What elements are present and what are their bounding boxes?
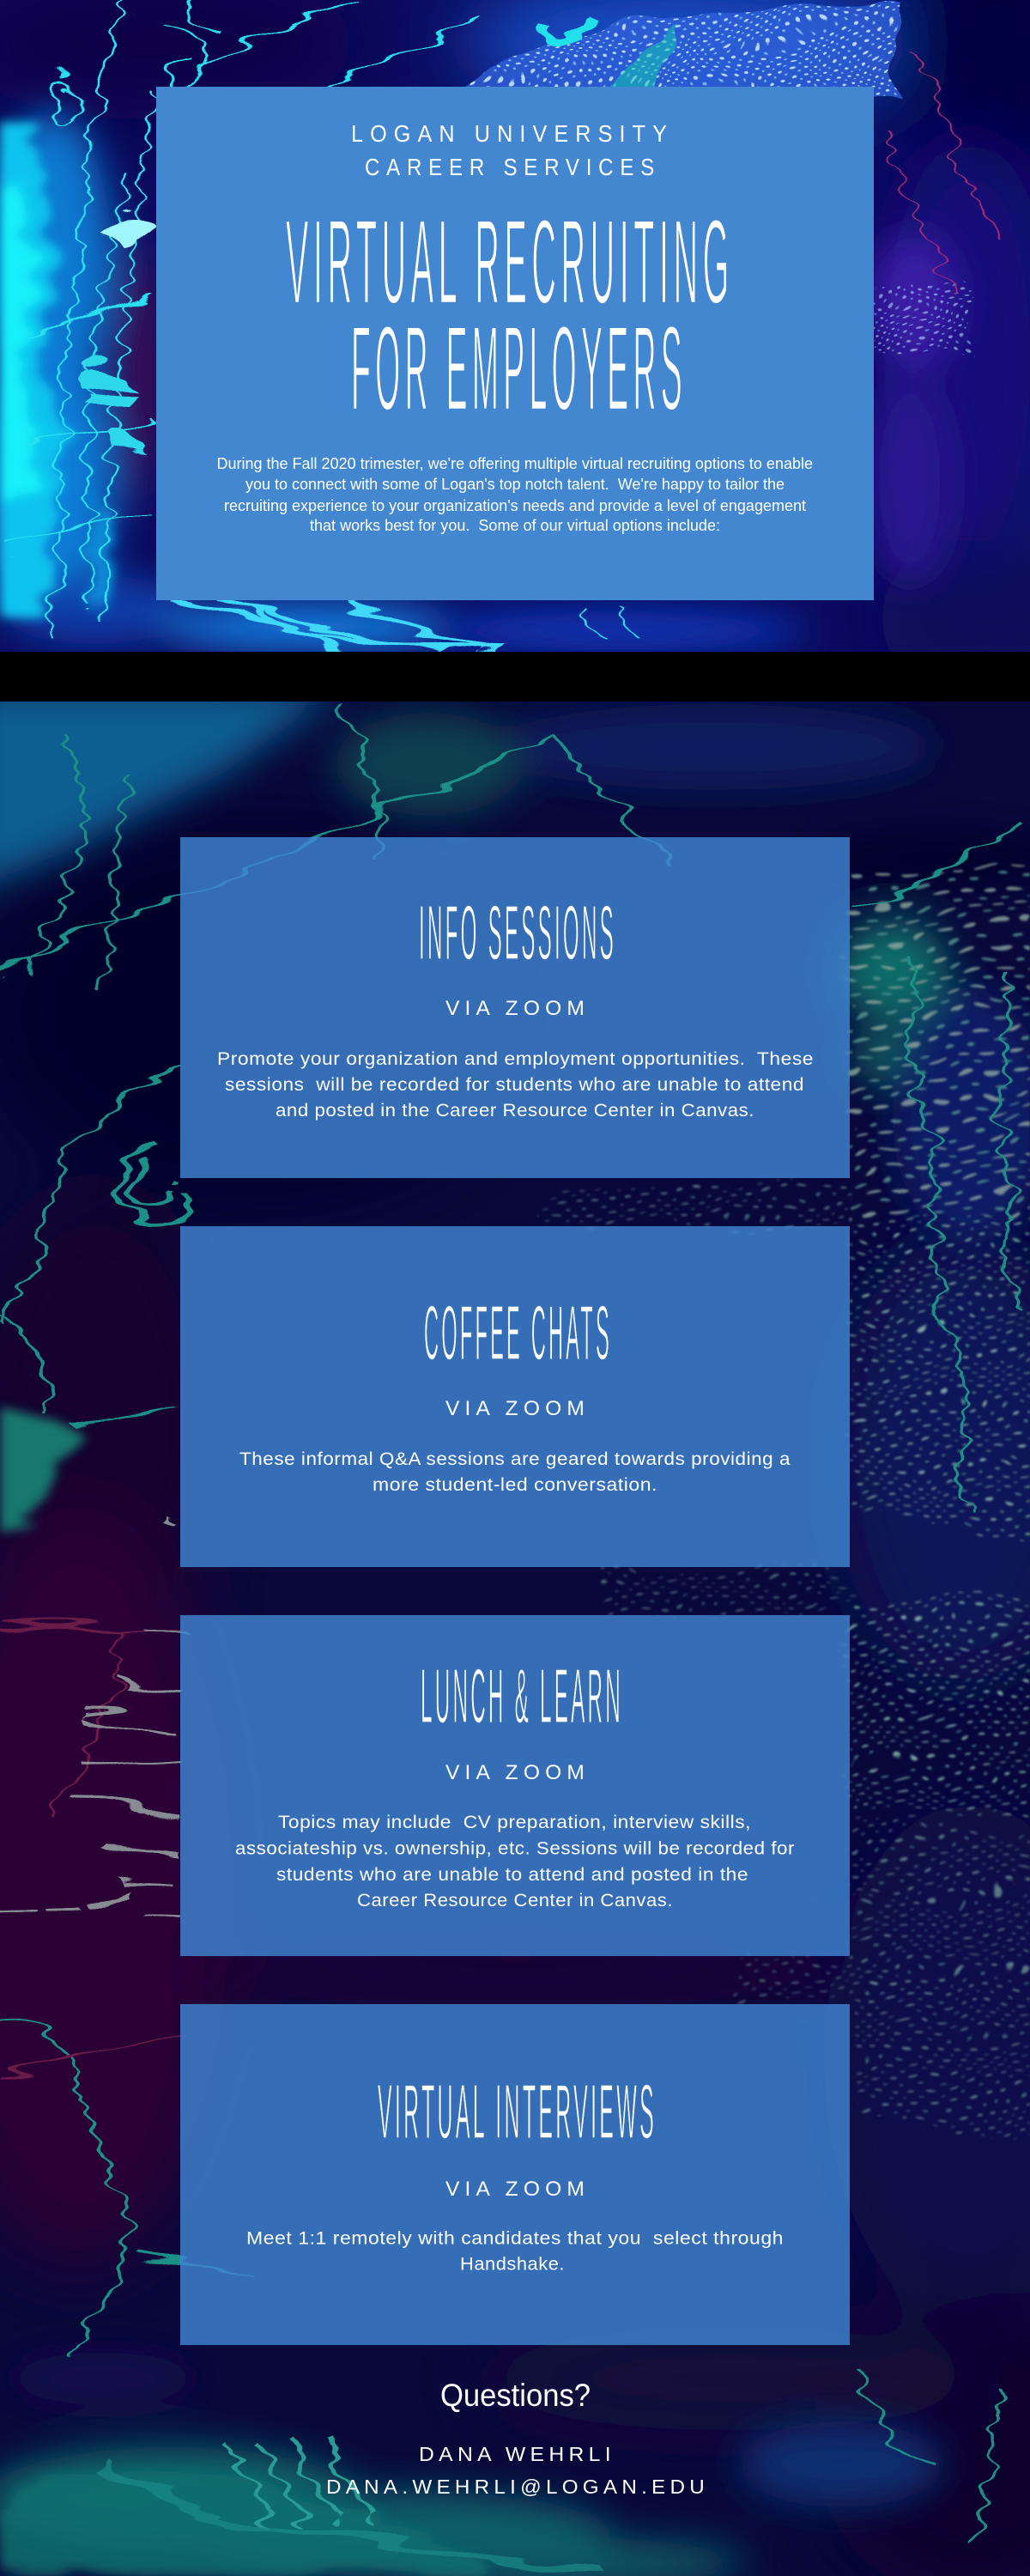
intro text: you to connect with some of Logan's top notch talent. We're happy to tailor the (245, 476, 785, 493)
intro text: During the Fall 2020 trimester, we're offering multiple virtual recruiting options to enable (216, 455, 813, 472)
pink lines (884, 52, 1004, 292)
maroon lines and pale ribs (0, 1520, 180, 2078)
panel: lunch and learn (180, 1615, 850, 1956)
background: lower image (0, 687, 1030, 2576)
globe dots (464, 9, 970, 352)
panel: info sessions (180, 837, 850, 1178)
panel: virtual interviews (180, 2004, 850, 2345)
subheading: VIA ZOOM (445, 997, 590, 1020)
panel: header (156, 87, 874, 600)
organisation name (351, 120, 674, 180)
description (246, 2229, 784, 2274)
questions heading: Questions? (440, 2378, 591, 2413)
intro text: recruiting experience to your organization's needs and provide a level of engagement (224, 497, 806, 514)
subheading: VIA ZOOM (445, 1397, 590, 1420)
description: Career Resource Center in Canvas. (357, 1891, 673, 1911)
panel: coffee chats (180, 1226, 850, 1567)
intro text: that works best for you. Some of our virtual options include: (310, 517, 720, 534)
description: students who are unable to attend and posted in the (276, 1865, 748, 1885)
contact details (326, 2443, 709, 2498)
title (286, 194, 734, 435)
organisation name: CAREER SERVICES (365, 154, 661, 180)
description (235, 1813, 795, 1911)
background: upper image (0, 0, 1030, 696)
organisation name: LOGAN UNIVERSITY (351, 120, 674, 147)
teal smears (0, 1408, 498, 2576)
black band (0, 652, 1030, 702)
description (239, 1449, 791, 1495)
description: These informal Q&A sessions are geared towards providing a (239, 1449, 791, 1469)
subheading: VIA ZOOM (445, 2178, 590, 2201)
description: Handshake. (460, 2255, 565, 2274)
description: Promote your organization and employment opportunities. These (217, 1049, 814, 1069)
description (217, 1049, 814, 1121)
subheading: VIA ZOOM (445, 1761, 590, 1784)
dotted globe fields (549, 859, 1030, 2147)
description: more student-led conversation. (373, 1475, 657, 1495)
description: associateship vs. ownership, etc. Sessions will be recorded for (235, 1839, 795, 1858)
cyan streaks (0, 120, 113, 618)
teal lines (0, 704, 1021, 2567)
description: Topics may include CV preparation, interview skills, (278, 1813, 751, 1832)
description: sessions will be recorded for students who are unable to attend (225, 1075, 804, 1095)
description: Meet 1:1 remotely with candidates that you select through (246, 2229, 784, 2248)
description: and posted in the Career Resource Center in Canvas. (276, 1101, 754, 1121)
contact details: DANA.WEHRLI@LOGAN.EDU (326, 2476, 709, 2498)
intro text (216, 455, 813, 534)
cyan circuit lines (9, 0, 635, 648)
contact details: DANA WEHRLI (419, 2443, 615, 2465)
